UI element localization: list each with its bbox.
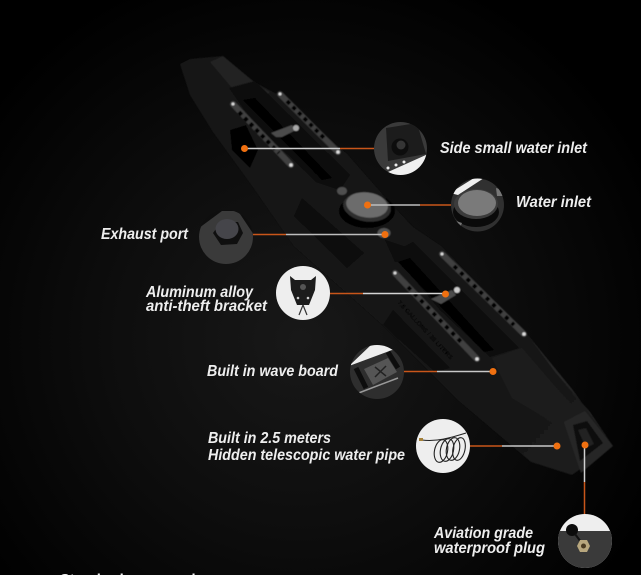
metal strip upper left [232,102,293,167]
label [208,430,405,464]
label: Side small water inlet [440,140,588,157]
icon: plug [557,513,613,569]
label: Aviation grade [433,525,533,542]
metal strip upper right [278,92,340,154]
icon: water inlet [451,178,504,232]
callout: water inlet [364,177,592,233]
upper deck bracket [271,125,299,137]
label: Exhaust port [101,226,189,243]
tail facets [492,348,582,430]
callout: side small water inlet [241,121,588,177]
icon: coiled pipe [416,419,470,473]
middle hull recesses [294,198,364,268]
upper deck recess [229,81,350,190]
callout: hidden telescopic water pipe [208,419,560,473]
lower deck bracket [431,287,460,304]
label: Water inlet [516,194,592,211]
lower deck recess [392,242,519,357]
metal strip lower left [394,272,479,361]
label: Aluminum alloy [145,284,254,301]
label: Built in 2.5 meters [208,430,331,447]
label: waterproof plug [434,540,546,557]
lower left perforated panel [383,310,450,372]
callout: aluminum alloy anti-theft bracket [145,266,449,320]
capacity text on board: 7.5 GALLONS / 28 LITERS [396,300,454,362]
callout: aviation grade waterproof plug [433,442,613,569]
icon: bracket [276,266,330,320]
label [145,284,268,315]
callout: built in wave board [207,344,496,400]
exhaust cap on board [378,228,390,238]
label: Hidden telescopic water pipe [208,447,405,464]
water inlet disc [337,187,395,228]
icon: exhaust port [199,211,253,264]
callout: exhaust port [101,209,388,266]
icon: side inlet [374,122,427,175]
board hull [180,56,613,475]
metal strip lower right [440,252,526,336]
icon: wave board [349,344,405,400]
plug recess [564,411,613,473]
label [433,525,546,557]
label: Built in wave board [207,363,338,380]
side recess [230,125,258,168]
label: anti-theft bracket [146,298,268,315]
